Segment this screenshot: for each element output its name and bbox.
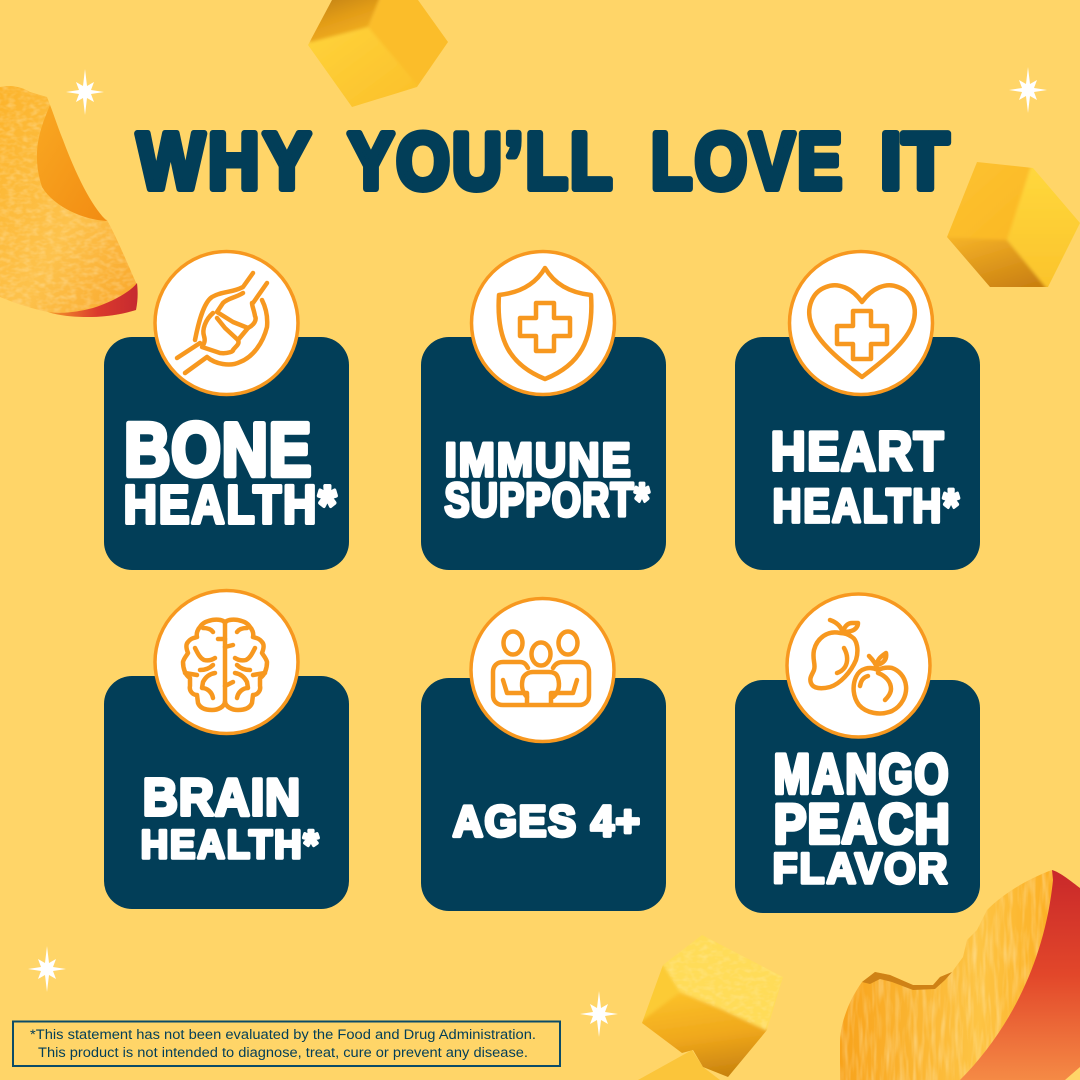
text: bone health	[124, 407, 337, 535]
icon: heart with cross	[809, 285, 915, 377]
title: YOU’LL	[348, 116, 612, 206]
fruit: mango cubes bottom	[638, 935, 782, 1080]
icon: shield with cross	[499, 268, 591, 379]
text: mango peach flavor: PEACH	[774, 793, 950, 856]
sparkle top left	[66, 69, 104, 115]
text: immune support: IMMUNE	[445, 433, 631, 486]
icon: mango and peach	[810, 620, 906, 713]
fruit: mango cube right	[947, 162, 1080, 287]
text: mango peach flavor: FLAVOR	[773, 844, 947, 892]
fruit: peach slice top left	[0, 86, 138, 317]
text: bone health: BONE	[124, 407, 311, 491]
panel: brain health	[104, 590, 349, 909]
panel: immune support	[421, 252, 666, 570]
text: ages 4+: AGES 4+	[453, 797, 640, 846]
title: WHY	[137, 117, 311, 206]
text: brain health: BRAIN	[143, 768, 300, 826]
text: heart health: HEART	[771, 420, 944, 482]
sparkle bottom left	[28, 946, 66, 992]
fruit: mango cube top	[308, 0, 448, 107]
disclaimer box: This product is not intended to diagnose, treat, cure or prevent any disease.	[38, 1045, 528, 1060]
title: IT	[880, 116, 949, 206]
sparkle bottom centre	[580, 991, 618, 1037]
text: mango peach flavor	[773, 743, 950, 892]
panel: ages 4+	[421, 598, 666, 911]
text: mango peach flavor: MANGO	[774, 743, 949, 805]
panel: mango peach flavor	[735, 594, 980, 913]
icon: brain	[183, 620, 267, 710]
text: brain health: HEALTH*	[141, 823, 319, 867]
title	[137, 116, 949, 206]
text: immune support	[444, 433, 650, 527]
fruit: peach slice bottom right	[840, 870, 1080, 1080]
disclaimer box	[13, 1022, 560, 1066]
title: LOVE	[651, 116, 842, 206]
panel: heart health	[735, 252, 980, 570]
text: immune support: SUPPORT*	[444, 474, 650, 527]
text: heart health: HEALTH*	[773, 481, 959, 533]
text: heart health	[771, 420, 959, 533]
disclaimer box: *This statement has not been evaluated by the Food and Drug Administration.	[30, 1027, 536, 1042]
panel: bone health	[104, 252, 349, 570]
text: brain health	[141, 768, 319, 867]
sparkle top right	[1009, 67, 1047, 113]
icon: joint	[177, 273, 267, 373]
text: bone health: HEALTH*	[124, 475, 337, 535]
icon: family	[493, 632, 589, 705]
